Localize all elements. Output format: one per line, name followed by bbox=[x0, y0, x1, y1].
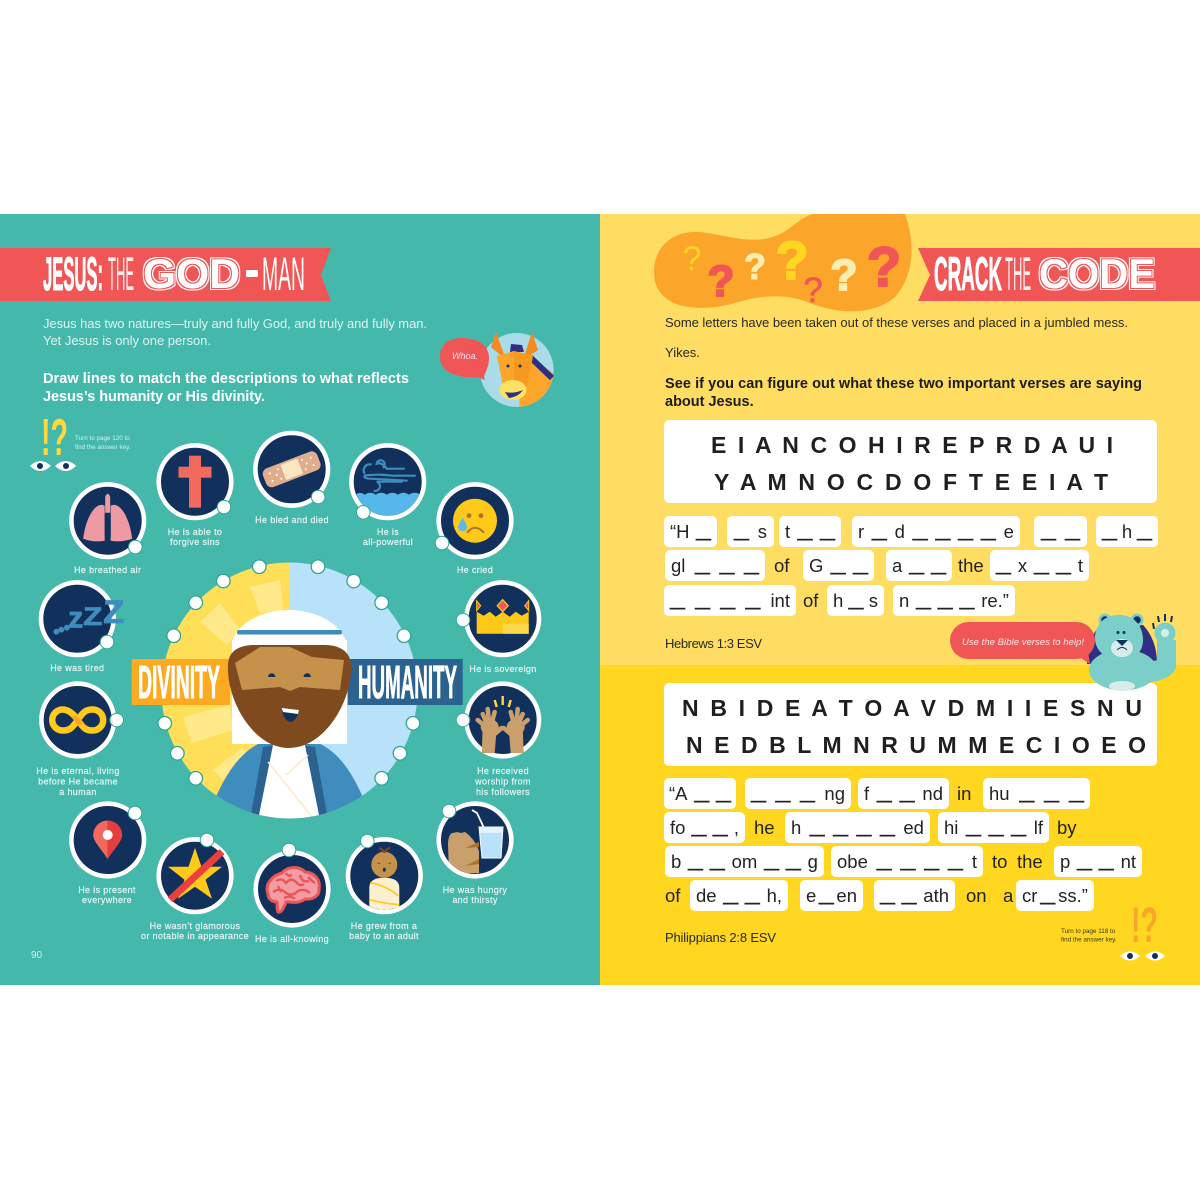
jumbled letters box one bbox=[664, 420, 1157, 503]
intro text: Yet Jesus is only one person. bbox=[43, 333, 211, 348]
verse two: Philippians fill-in tiles: _ bbox=[688, 840, 703, 870]
icon: sleeping zzz: z bbox=[68, 602, 83, 635]
label: He is able to bbox=[168, 527, 222, 537]
verse one: Hebrews fill-in tiles: “H bbox=[670, 521, 690, 542]
verse two: Philippians fill-in tiles: _ bbox=[966, 806, 981, 836]
text: HUMANITY bbox=[358, 656, 457, 708]
headdress bbox=[232, 610, 347, 744]
verse two: Philippians fill-in tiles: _ bbox=[1099, 840, 1114, 870]
verse one: Hebrews fill-in tiles: _ bbox=[1034, 544, 1049, 574]
icon: crown bbox=[456, 582, 539, 655]
verse two: Philippians fill-in tiles: _ bbox=[900, 840, 915, 870]
verse one: Hebrews fill-in tiles: int bbox=[770, 590, 790, 611]
verse one: Hebrews fill-in tiles: _ bbox=[670, 580, 685, 610]
orange blob with question marks: ? bbox=[803, 271, 823, 310]
verse two: Philippians fill-in tiles: _ bbox=[764, 840, 779, 870]
verse two: Philippians fill-in tiles: _ bbox=[1044, 772, 1059, 802]
verse one: Hebrews fill-in tiles: _ bbox=[695, 544, 710, 574]
label: forgive sins bbox=[170, 537, 220, 547]
panel: right top yellow area bbox=[600, 214, 1200, 665]
verse one: Hebrews fill-in tiles: of bbox=[774, 555, 789, 576]
panel: right bottom yellow area bbox=[600, 665, 1200, 985]
orange blob with question marks: ? bbox=[867, 235, 901, 298]
verse two: Philippians fill-in tiles: h ed bbox=[791, 817, 924, 838]
verse one: Hebrews fill-in tiles: _ bbox=[981, 510, 996, 540]
verse two: Philippians fill-in tiles: the bbox=[1017, 851, 1043, 872]
intro text: Jesus has two natures—truly and fully God, and truly and fully man. bbox=[43, 316, 427, 331]
verse two: Philippians fill-in tiles: by bbox=[1057, 817, 1077, 838]
verse one: Hebrews fill-in tiles bbox=[664, 510, 1158, 616]
verse two: Philippians fill-in tiles: _ bbox=[948, 840, 963, 870]
central illustration: Jesus with divinity and humanity bbox=[132, 560, 463, 825]
orange blob with question marks: ? bbox=[683, 240, 701, 278]
instruction text bbox=[43, 371, 409, 405]
verse one: Hebrews fill-in tiles: _ bbox=[745, 580, 760, 610]
instruction text right bbox=[665, 376, 1142, 410]
verse one: Hebrews fill-in tiles: _ bbox=[909, 544, 924, 574]
verse one: Hebrews fill-in tiles: t bbox=[785, 521, 790, 542]
verse two: Philippians fill-in tiles: _ bbox=[924, 840, 939, 870]
verse one: Hebrews fill-in tiles: _ bbox=[853, 544, 868, 574]
verse one: Hebrews fill-in tiles: _ bbox=[1056, 544, 1071, 574]
verse one: Hebrews fill-in tiles: _ bbox=[695, 580, 710, 610]
robe bbox=[216, 744, 362, 818]
label: He received bbox=[477, 766, 529, 776]
orange blob with question marks: ? bbox=[831, 251, 857, 300]
heading banner: Crack the Code: CODE bbox=[1039, 250, 1155, 297]
verse two: Philippians fill-in tiles: _ bbox=[723, 874, 738, 904]
icon: location pin bbox=[71, 804, 144, 876]
verse two: Philippians fill-in tiles: _ bbox=[902, 874, 917, 904]
heading banner: Crack the Code bbox=[918, 247, 1200, 301]
instruction text right: See if you can figure out what these two important verses are saying bbox=[665, 376, 1142, 392]
label: He is bbox=[377, 527, 399, 537]
label: and thirsty bbox=[452, 895, 498, 905]
label: He breathed air bbox=[74, 565, 141, 575]
verse one: Hebrews fill-in tiles: a bbox=[892, 555, 902, 576]
character: horse with speech bubble bbox=[440, 332, 554, 407]
verse one: Hebrews fill-in tiles: _ bbox=[831, 544, 846, 574]
verse two: Philippians fill-in tiles: e en bbox=[806, 885, 857, 906]
verse two: Philippians fill-in tiles: _ bbox=[1069, 772, 1084, 802]
answer hint right: find the answer key. bbox=[1061, 936, 1117, 944]
verse two: Philippians fill-in tiles: hi lf bbox=[944, 817, 1043, 838]
verse two: Philippians fill-in tiles: ng bbox=[824, 783, 845, 804]
label: or notable in appearance bbox=[141, 931, 249, 941]
verse two: Philippians fill-in tiles: _ bbox=[692, 806, 707, 836]
verse two: Philippians fill-in tiles: “A bbox=[669, 783, 688, 804]
verse one: Hebrews fill-in tiles: _ bbox=[1137, 510, 1152, 540]
heading banner: Jesus the God-Man: THE bbox=[108, 247, 134, 300]
label: all-powerful bbox=[363, 537, 413, 547]
verse two: Philippians fill-in tiles: on bbox=[966, 885, 987, 906]
label: He was hungry bbox=[443, 885, 507, 895]
verse one: Hebrews fill-in tiles: _ bbox=[848, 580, 864, 610]
icon: cross bbox=[159, 445, 231, 518]
label: He is all-knowing bbox=[255, 934, 329, 944]
verse two: Philippians fill-in tiles: _ bbox=[694, 772, 709, 802]
verse one: Hebrews fill-in tiles: r d e bbox=[858, 521, 1014, 542]
verse two: Philippians fill-in tiles: _ bbox=[775, 772, 790, 802]
label: He cried bbox=[457, 565, 493, 575]
orange blob with question marks: ? bbox=[776, 231, 808, 291]
verse one: Hebrews fill-in tiles: _ bbox=[720, 580, 735, 610]
heading banner: Jesus the God-Man bbox=[0, 247, 331, 301]
verse one: Hebrews fill-in tiles: _ bbox=[958, 510, 973, 540]
verse one: Hebrews fill-in tiles: _ bbox=[820, 510, 835, 540]
verse one: Hebrews fill-in tiles: gl bbox=[671, 555, 685, 576]
jumbled letters box two: N E D B L M N R U M M E C I O E O bbox=[686, 732, 1146, 758]
verse two: Philippians fill-in tiles: ath bbox=[923, 885, 949, 906]
answer hint left: !? bbox=[41, 409, 68, 467]
verse two: Philippians fill-in tiles: _ bbox=[751, 772, 766, 802]
verse one: Hebrews fill-in tiles: of bbox=[803, 590, 818, 611]
verse two: Philippians fill-in tiles: _ bbox=[989, 806, 1004, 836]
verse two: Philippians fill-in tiles: _ bbox=[833, 806, 848, 836]
intro text bbox=[43, 316, 427, 348]
label: He is sovereign bbox=[469, 664, 537, 674]
verse two: Philippians fill-in tiles: b om g bbox=[671, 851, 818, 872]
label: He is eternal, living bbox=[36, 766, 120, 776]
verse two: Philippians fill-in tiles: f nd bbox=[864, 783, 943, 804]
humanity label bbox=[348, 656, 463, 708]
label: baby to an adult bbox=[349, 931, 419, 941]
verse two: Philippians fill-in tiles: _ bbox=[819, 874, 834, 904]
verse two: Philippians fill-in tiles: _ bbox=[857, 806, 872, 836]
icon: wind and water bbox=[351, 445, 424, 530]
central illustration: Jesus with divinity and humanity: DIVINITY bbox=[138, 656, 220, 708]
verse one: Hebrews fill-in tiles: _ bbox=[931, 544, 946, 574]
panel: left teal page bbox=[0, 214, 600, 985]
verse two: Philippians fill-in tiles: _ bbox=[713, 806, 728, 836]
verse two: Philippians fill-in tiles: _ bbox=[1011, 806, 1026, 836]
verse one: Hebrews fill-in tiles: _ bbox=[913, 510, 928, 540]
jumbled letters box two: N B I D E A T O A V D M I I E S N U bbox=[682, 695, 1142, 721]
verse two: Philippians fill-in tiles: _ bbox=[1040, 874, 1055, 904]
label: before He became bbox=[38, 776, 118, 786]
icon: raised hands bbox=[456, 684, 539, 756]
verse one: Hebrews fill-in tiles: n re.” bbox=[899, 590, 1009, 611]
verse one: Hebrews fill-in tiles: _ bbox=[1065, 510, 1080, 540]
verse one: Hebrews fill-in tiles: _ bbox=[734, 510, 749, 540]
answer hint right: !? bbox=[1131, 897, 1158, 953]
face bbox=[228, 645, 351, 748]
heading banner: Jesus the God-Man: MAN bbox=[262, 247, 305, 300]
verse two: Philippians fill-in tiles: to bbox=[992, 851, 1007, 872]
verse one: Hebrews fill-in tiles: _ bbox=[935, 510, 950, 540]
verse one: Hebrews fill-in tiles: _ bbox=[959, 580, 974, 610]
jumbled letters box two bbox=[664, 683, 1157, 766]
verse one: Hebrews fill-in tiles: _ bbox=[1102, 510, 1117, 540]
verse two: Philippians fill-in tiles: _ bbox=[880, 874, 895, 904]
intro text right bbox=[665, 315, 1128, 360]
character: bear with speech bubble: Use the Bible verses to help! bbox=[962, 637, 1084, 648]
label: worship from bbox=[474, 776, 531, 786]
verse one: Hebrews fill-in tiles: the bbox=[958, 555, 984, 576]
verse two: Philippians fill-in tiles: a bbox=[1003, 885, 1013, 906]
orange blob with question marks bbox=[654, 214, 912, 311]
verse one: Hebrews fill-in tiles: _ bbox=[996, 544, 1011, 574]
orange blob with question marks: ? bbox=[744, 246, 766, 287]
icon: swaddled baby bbox=[348, 834, 421, 912]
label: He bled and died bbox=[255, 515, 329, 525]
verse two: Philippians fill-in tiles: _ bbox=[880, 806, 895, 836]
page number: 90 bbox=[31, 950, 43, 961]
verse one: Hebrews fill-in tiles: h bbox=[1122, 521, 1132, 542]
verse reference: Philippians: Philippians 2:8 ESV bbox=[665, 930, 776, 945]
verse two: Philippians fill-in tiles: in bbox=[957, 783, 971, 804]
icon: brain bbox=[256, 843, 328, 925]
verse one: Hebrews fill-in tiles: _ bbox=[696, 510, 711, 540]
verse one: Hebrews fill-in tiles: _ bbox=[798, 510, 813, 540]
matching dots on halo bbox=[158, 560, 420, 785]
icon: sleeping zzz bbox=[41, 582, 124, 655]
answer hint left: find the answer key. bbox=[75, 444, 131, 451]
label: He is present bbox=[78, 885, 136, 895]
verse one: Hebrews fill-in tiles: _ bbox=[916, 580, 931, 610]
jumbled letters box one: E I A N C O H I R E P R D A U I bbox=[711, 432, 1113, 458]
instruction text: Jesus’s humanity or His divinity. bbox=[43, 389, 265, 405]
verse two: Philippians fill-in tiles: of bbox=[665, 885, 680, 906]
verse two: Philippians fill-in tiles: _ bbox=[716, 772, 731, 802]
label: He was tired bbox=[50, 663, 104, 673]
heading banner: Crack the Code: CRACK bbox=[934, 247, 1002, 300]
verse one: Hebrews fill-in tiles: _ bbox=[1041, 510, 1056, 540]
verse two: Philippians fill-in tiles: cr ss.” bbox=[1022, 885, 1088, 906]
orange blob with question marks: ? bbox=[708, 257, 734, 306]
heading banner: Crack the Code: THE bbox=[1005, 247, 1031, 300]
icon: bandage bbox=[255, 433, 328, 506]
answer hint left bbox=[30, 409, 131, 471]
label: He grew from a bbox=[351, 921, 417, 931]
verse one: Hebrews fill-in tiles: x t bbox=[1018, 555, 1083, 576]
icon: lungs bbox=[71, 484, 144, 557]
verse two: Philippians fill-in tiles: _ bbox=[877, 772, 892, 802]
verse two: Philippians fill-in tiles: _ bbox=[1019, 772, 1034, 802]
verse two: Philippians fill-in tiles: he bbox=[754, 817, 775, 838]
verse two: Philippians fill-in tiles: _ bbox=[877, 840, 892, 870]
label: his followers bbox=[476, 787, 530, 797]
verse one: Hebrews fill-in tiles: s bbox=[758, 521, 767, 542]
verse one: Hebrews fill-in tiles: _ bbox=[744, 544, 759, 574]
verse reference: Hebrews: Hebrews 1:3 ESV bbox=[665, 636, 762, 651]
icon: infinity bbox=[41, 684, 124, 756]
verse two: Philippians fill-in tiles: _ bbox=[710, 840, 725, 870]
verse two: Philippians fill-in tiles: _ bbox=[800, 772, 815, 802]
verse two: Philippians fill-in tiles: _ bbox=[900, 772, 915, 802]
jumbled letters box one: Y A M N O C D O F T E E I A T bbox=[714, 469, 1108, 495]
answer hint right bbox=[1061, 897, 1165, 960]
answer hint right: Turn to page 118 to bbox=[1061, 928, 1116, 935]
verse one: Hebrews fill-in tiles: _ bbox=[872, 510, 887, 540]
instruction text right: about Jesus. bbox=[665, 394, 754, 410]
verse two: Philippians fill-in tiles bbox=[664, 772, 1142, 911]
icon: crossed out star bbox=[159, 833, 231, 912]
label: a human bbox=[59, 787, 97, 797]
verse two: Philippians fill-in tiles: p nt bbox=[1060, 851, 1136, 872]
heading banner: Jesus the God-Man: JESUS: bbox=[43, 247, 103, 300]
intro text right: Yikes. bbox=[665, 345, 700, 360]
character: horse with speech bubble: Whoa. bbox=[452, 351, 478, 361]
verse two: Philippians fill-in tiles: obe t bbox=[837, 851, 977, 872]
verse two: Philippians fill-in tiles: _ bbox=[810, 806, 825, 836]
verse two: Philippians fill-in tiles: _ bbox=[786, 840, 801, 870]
heading banner: Jesus the God-Man: GOD bbox=[143, 250, 240, 297]
halo background bbox=[162, 562, 418, 818]
intro text right: Some letters have been taken out of these verses and placed in a jumbled mess. bbox=[665, 315, 1128, 330]
verse two: Philippians fill-in tiles: _ bbox=[745, 874, 760, 904]
icon: bread and drink bbox=[439, 804, 511, 876]
verse one: Hebrews fill-in tiles: _ bbox=[719, 544, 734, 574]
verse two: Philippians fill-in tiles: fo , bbox=[670, 817, 739, 838]
verse one: Hebrews fill-in tiles: G bbox=[809, 555, 823, 576]
verse two: Philippians fill-in tiles: de h, bbox=[696, 885, 782, 906]
answer hint left: Turn to page 120 to bbox=[75, 435, 130, 442]
verse one: Hebrews fill-in tiles: _ bbox=[938, 580, 953, 610]
character: bear with speech bubble bbox=[950, 614, 1176, 691]
verse two: Philippians fill-in tiles: _ bbox=[1077, 840, 1092, 870]
icon: sleeping zzz: Z bbox=[103, 594, 124, 630]
divinity label bbox=[132, 656, 230, 708]
verse two: Philippians fill-in tiles: hu bbox=[989, 783, 1010, 804]
instruction text: Draw lines to match the descriptions to what reflects bbox=[43, 371, 409, 387]
icon: sleeping zzz: Z bbox=[83, 603, 102, 631]
label: everywhere bbox=[82, 895, 132, 905]
icon: crying face bbox=[435, 484, 511, 557]
verse one: Hebrews fill-in tiles: h s bbox=[833, 590, 878, 611]
label: He wasn’t glamorous bbox=[150, 921, 240, 931]
